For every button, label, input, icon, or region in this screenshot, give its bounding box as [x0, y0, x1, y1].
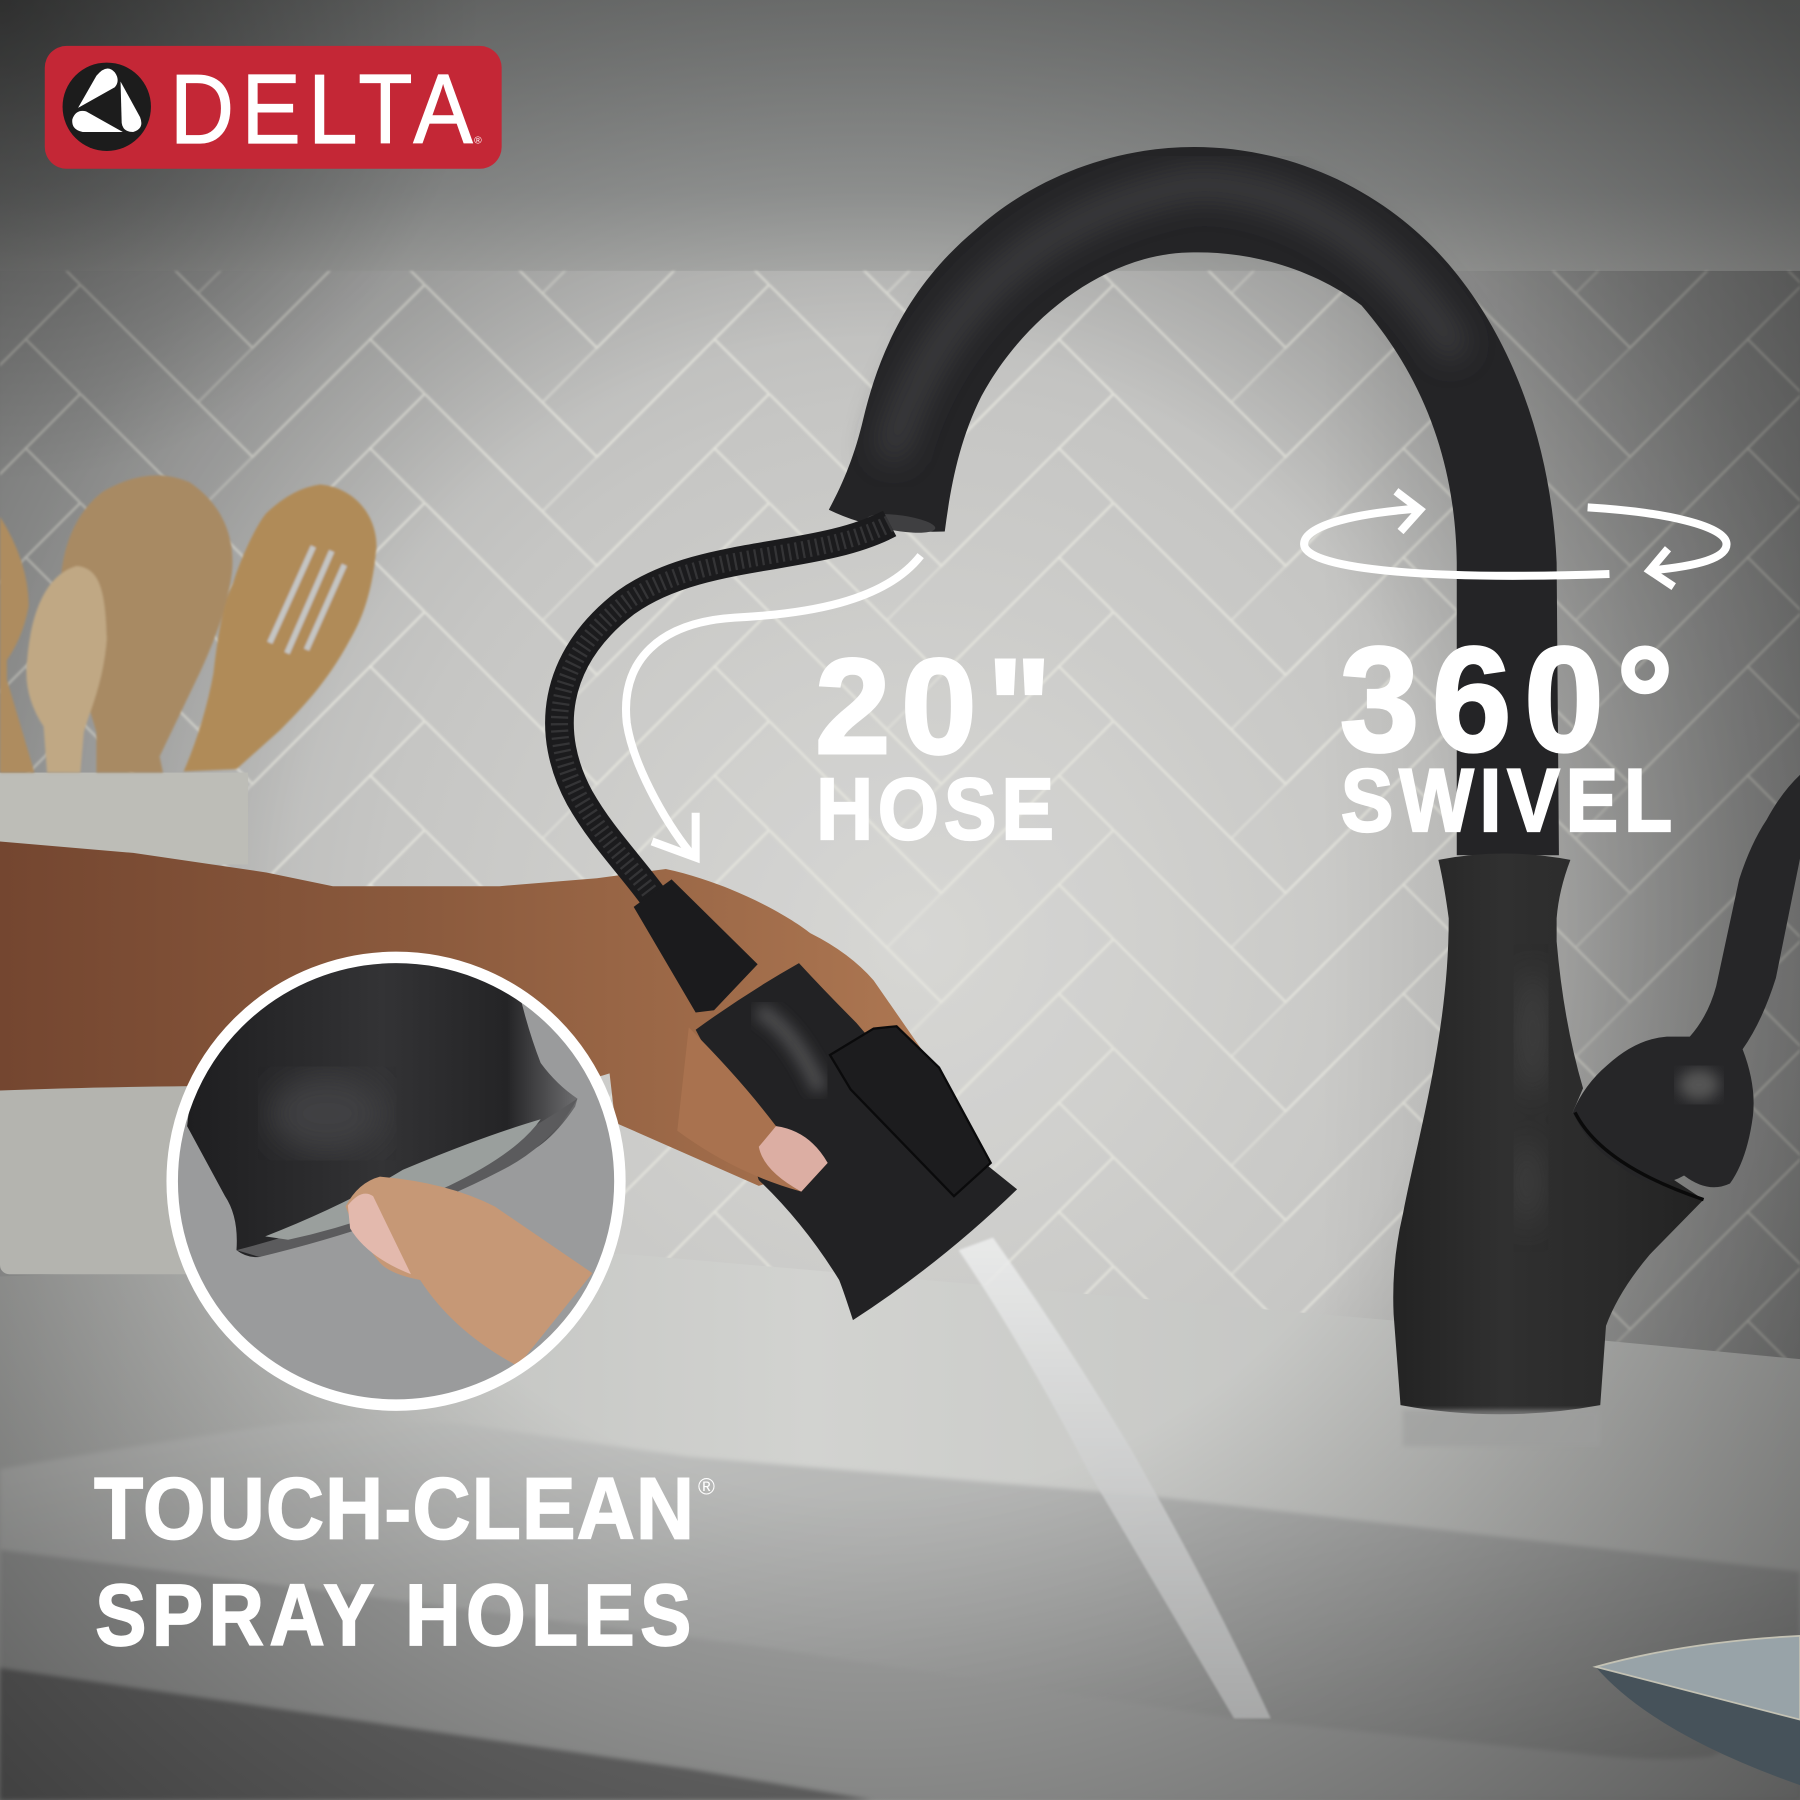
logo mark	[63, 63, 151, 151]
spout arch	[829, 147, 1559, 855]
label: touch-clean spray holes: SPRAY HOLES	[95, 1568, 691, 1664]
wooden spoons	[0, 475, 377, 773]
inset circle: touch-clean spray holes	[172, 953, 620, 1405]
inset: spray face ring	[236, 1099, 577, 1257]
label: 20 inch hose	[815, 630, 1054, 858]
logo: Delta	[45, 46, 502, 169]
inset: finger nail	[348, 1194, 411, 1274]
base reflection	[1403, 1410, 1600, 1446]
inset: spray face body	[187, 953, 577, 1257]
water stream	[959, 1238, 1271, 1718]
label: 20 inch hose: 20"	[815, 630, 1052, 782]
fingernail	[759, 1126, 828, 1192]
arrow: hose length	[626, 556, 921, 858]
background: countertop	[0, 1254, 1800, 1800]
label: 360 swivel: SWIVEL	[1341, 750, 1672, 850]
hose	[559, 523, 890, 901]
plate at lower right	[1596, 1636, 1800, 1785]
label: touch-clean spray holes: ®	[698, 1474, 715, 1500]
handle highlight	[1678, 1069, 1720, 1101]
hand and arm	[0, 841, 931, 1186]
logo wordmark: DELTA	[170, 54, 473, 164]
index finger over spray head	[677, 1027, 828, 1192]
handle collar	[1575, 1112, 1704, 1200]
hose connector	[634, 879, 758, 1012]
spray head toggle	[830, 1026, 991, 1196]
spout outlet	[866, 511, 936, 536]
label: 20 inch hose: HOSE	[816, 760, 1054, 858]
faucet base body	[1393, 854, 1704, 1414]
spout highlight	[890, 184, 1458, 459]
background: sink front rim	[0, 1550, 1800, 1800]
base highlights	[1516, 970, 1545, 1226]
inset: finger	[346, 1177, 592, 1366]
label: 360 swivel: 360°	[1340, 616, 1674, 782]
label: touch-clean spray holes: TOUCH-CLEAN	[94, 1459, 694, 1557]
background: upper wall	[0, 0, 1800, 276]
label: touch-clean spray holes	[94, 1459, 715, 1664]
inset: rubber spray holes	[265, 1119, 541, 1240]
spray head highlight	[758, 1010, 821, 1091]
registered mark: ®	[474, 135, 482, 146]
arrows: 360 degree swivel	[1304, 491, 1727, 587]
spray head	[696, 963, 1017, 1320]
background: front apron	[0, 1668, 872, 1800]
background: sink basin	[0, 1421, 1800, 1800]
utensil holder	[0, 773, 248, 1274]
faucet handle	[1573, 775, 1800, 1187]
background: herringbone tile backsplash	[0, 271, 1800, 1373]
inset: nozzle highlight	[270, 1074, 385, 1153]
faucet: spout and base	[829, 147, 1800, 1414]
